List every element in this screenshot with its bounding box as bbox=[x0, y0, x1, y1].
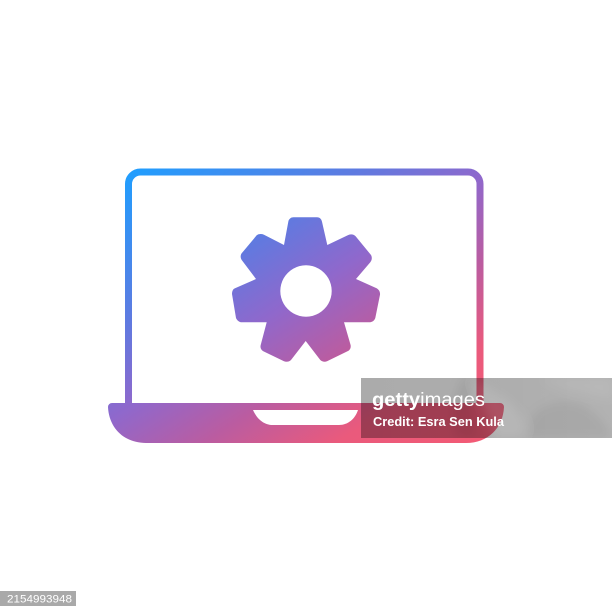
image id badge bbox=[0, 591, 76, 606]
watermark credit: Credit: Esra Sen Kula bbox=[373, 415, 505, 429]
laptop icon bbox=[108, 172, 504, 443]
watermark logo: gettyimages bbox=[372, 390, 485, 411]
laptop screen frame bbox=[128, 172, 480, 404]
image id number: 2154993948 bbox=[7, 594, 72, 606]
badge background bbox=[0, 591, 76, 606]
watermark swirl shading bbox=[458, 384, 596, 432]
watermark background bbox=[361, 378, 612, 438]
laptop base bbox=[108, 403, 504, 443]
gear icon bbox=[232, 217, 380, 362]
watermark panel bbox=[361, 378, 612, 438]
